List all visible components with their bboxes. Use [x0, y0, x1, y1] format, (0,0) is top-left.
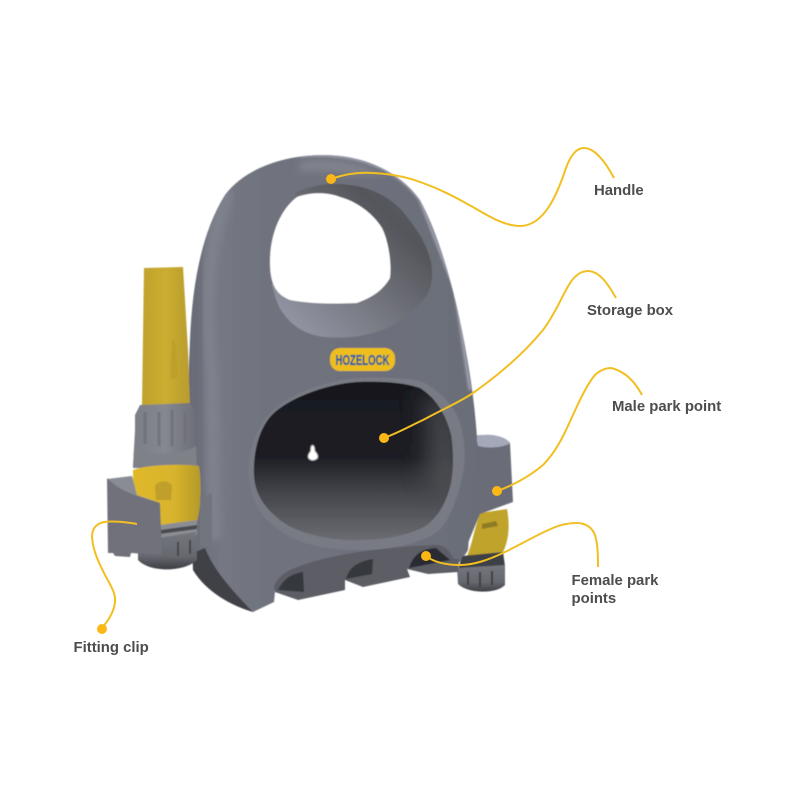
- callout: Handle: Handle: [594, 183, 644, 199]
- fitting clip: [107, 476, 162, 557]
- right inner wall shading: [414, 390, 453, 492]
- male park point block: [440, 435, 513, 562]
- yellow grip: [133, 465, 201, 530]
- side bracket: [200, 493, 212, 547]
- grey collar: [133, 403, 197, 468]
- callout: Female park points: [421, 523, 659, 607]
- callout: Fitting clip: Fitting clip: [74, 640, 149, 656]
- callout: Male park point: [492, 368, 721, 496]
- icon: nozzle fitting: [133, 267, 212, 569]
- callout: Storage box: [379, 271, 674, 443]
- callout: Handle: [326, 148, 644, 226]
- lower rings and nut: [160, 520, 197, 541]
- callout: Storage box: Storage box: [587, 303, 674, 319]
- product illustration: [107, 155, 513, 612]
- logo: HOZELOCK: HOZELOCK: [336, 353, 390, 369]
- callout: Female park points: points: [572, 591, 616, 607]
- storage window: [249, 378, 465, 550]
- panel: storage box body: [188, 155, 513, 612]
- handle opening: [270, 184, 432, 338]
- callout: Female park points: Female park: [572, 573, 659, 589]
- logo: HOZELOCK: [330, 348, 395, 371]
- keyhole slot: [308, 445, 318, 460]
- nozzle tip: [142, 267, 190, 405]
- main body shell: [188, 155, 477, 612]
- dark left face at the base: [193, 548, 253, 612]
- callout: Fitting clip: [74, 522, 149, 656]
- callout: Male park point: Male park point: [612, 399, 721, 415]
- icon: right female park fitting: [457, 509, 509, 592]
- underside with hose slots: [270, 535, 460, 600]
